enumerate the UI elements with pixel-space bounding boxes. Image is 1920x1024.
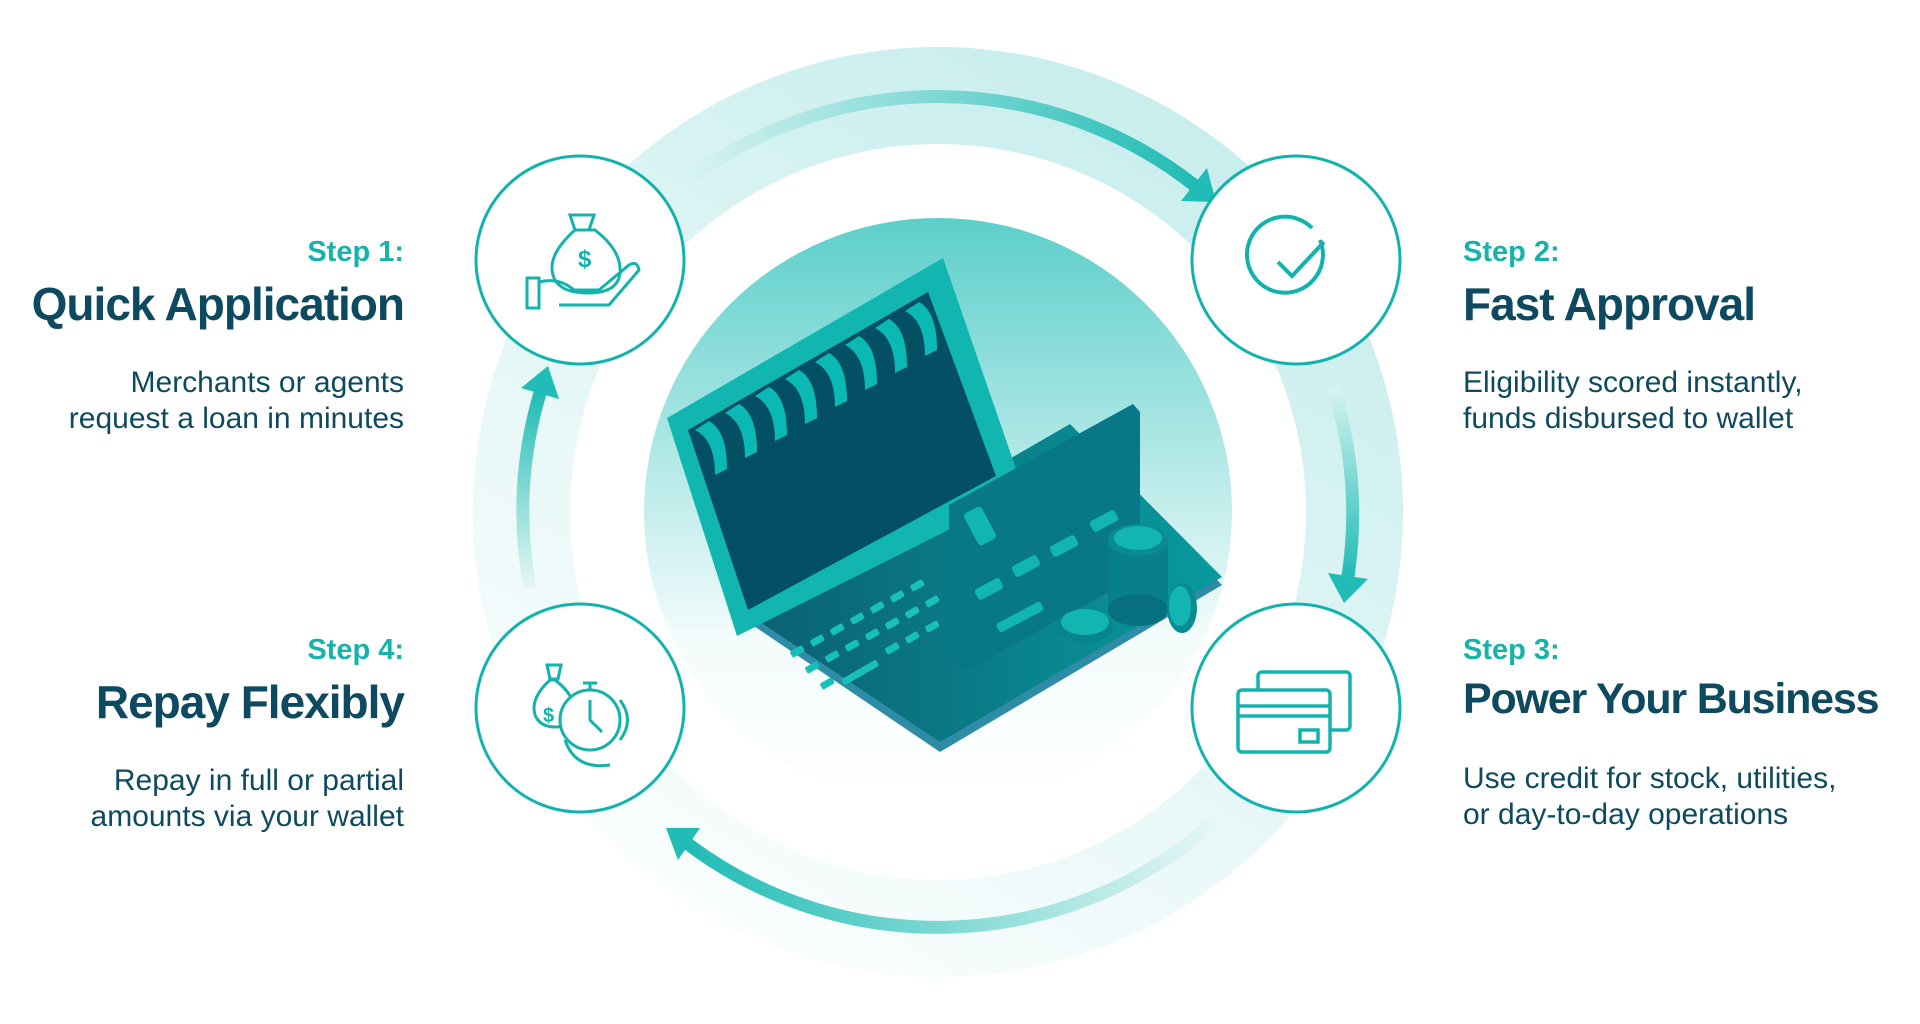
icon: money bag in hand: $ <box>578 246 592 273</box>
text: step 2: Eligibility scored instantly, <box>1463 366 1803 399</box>
text: step 4: Repay in full or partial <box>114 764 404 797</box>
text: step 1: request a loan in minutes <box>69 402 404 435</box>
text: step 4: Repay Flexibly <box>96 676 404 728</box>
text: step 3: Power Your Business <box>1463 675 1878 723</box>
text: step 4 <box>91 634 405 833</box>
text: step 3: Use credit for stock, utilities, <box>1463 762 1836 795</box>
text: step 4: amounts via your wallet <box>91 800 404 833</box>
text: step 2: Step 2: <box>1463 236 1560 268</box>
text: step 1: Quick Application <box>32 278 404 330</box>
text: step 4: Step 4: <box>307 634 404 666</box>
arrow: bottom <box>666 820 1216 927</box>
text: step 3: or day-to-day operations <box>1463 798 1788 831</box>
text: step 1: Merchants or agents <box>131 366 404 399</box>
text: step 3: Step 3: <box>1463 634 1560 666</box>
text: step 1 <box>32 236 404 435</box>
arrow: left <box>521 366 559 588</box>
text: step 1: Step 1: <box>307 236 404 268</box>
arrow: top <box>691 97 1216 202</box>
icon: credit cards <box>1238 672 1350 752</box>
text: step 2 <box>1463 236 1803 435</box>
illustration: laptop with card and coins <box>667 258 1222 752</box>
outer ring <box>473 47 1403 977</box>
icon: check circle <box>1247 217 1324 293</box>
center circle <box>644 218 1232 806</box>
icon: money bag in hand <box>527 215 639 308</box>
icon: money bag with stopwatch: $ <box>543 705 554 727</box>
icon: money bag with stopwatch <box>534 665 628 766</box>
text: step 3 <box>1463 634 1878 831</box>
step circles <box>476 156 1400 812</box>
text: step 2: Fast Approval <box>1463 278 1755 330</box>
text: step 2: funds disbursed to wallet <box>1463 402 1793 435</box>
arrow: right <box>1328 387 1368 603</box>
